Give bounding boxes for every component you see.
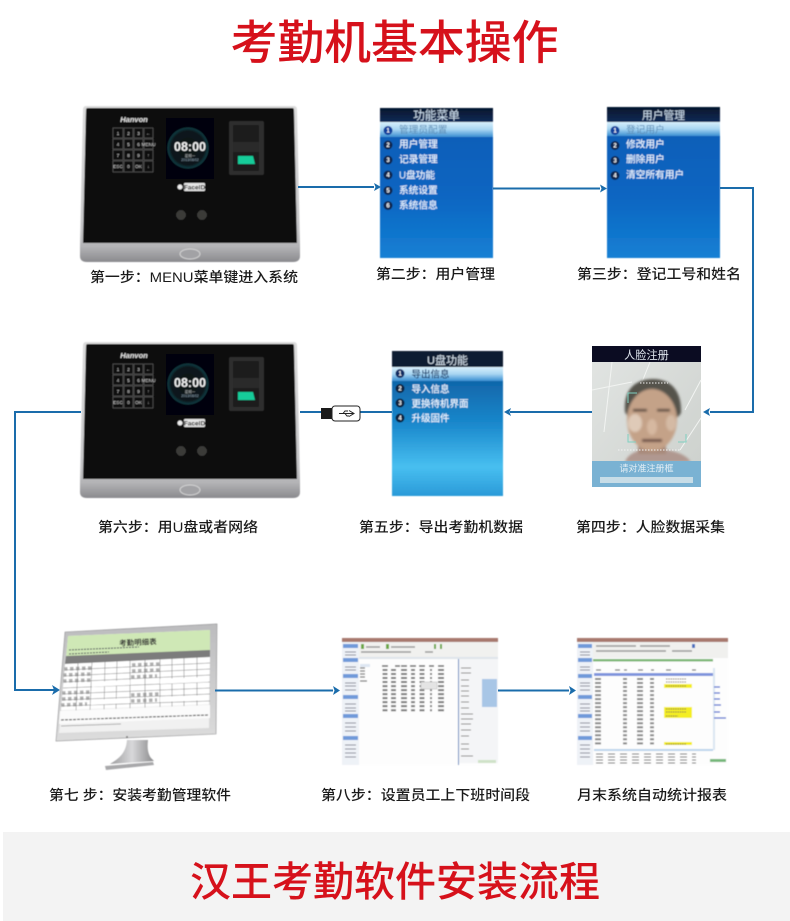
menu items: 4: [613, 174, 617, 180]
monitor stand: [110, 740, 154, 764]
screen clock: 星期一: [185, 389, 196, 394]
keypad: 4: [117, 378, 120, 384]
menu items: 3: [398, 401, 402, 407]
screen clock: 2013/08/02: [181, 394, 199, 398]
menu items: 1: [613, 128, 617, 134]
table selected row: [594, 673, 713, 676]
menu header: [380, 108, 493, 122]
footer heading: 汉王考勤软件安装流程: [190, 859, 600, 905]
infrared lenses: [176, 446, 206, 456]
menu items: [396, 368, 469, 424]
popup dialog: [421, 682, 437, 689]
prompt bar: [592, 461, 701, 487]
panel: USB function screen: U盘功能: [427, 353, 468, 367]
merged white rows: [91, 677, 208, 705]
menu items: 4: [398, 416, 402, 422]
caption step 5: 第五步：导出考勤机数据: [359, 519, 523, 535]
panel: face registration screen: [592, 346, 701, 487]
table body: [61, 657, 210, 710]
menu items: [610, 123, 684, 181]
keypad: ↑: [147, 154, 150, 159]
menu items: 3: [613, 158, 617, 164]
menu items: 清空所有用户: [626, 168, 684, 181]
keypad: 9: [137, 389, 140, 395]
device body: [80, 342, 300, 498]
screen clock: 2013/08/02: [181, 158, 199, 162]
menu items: 系统信息: [399, 198, 438, 212]
fingerprint sensor: [229, 357, 264, 411]
arrow: step 1 to step 2: [298, 183, 381, 191]
panel: USB function screen: [392, 351, 503, 496]
monitor with attendance sheet: 考勤明细表: [119, 636, 157, 648]
menu items: 3: [386, 158, 390, 164]
keypad: 2: [127, 367, 130, 373]
toolbar: [359, 642, 498, 659]
monitor with attendance sheet: [56, 624, 217, 770]
icon: USB drive: [321, 406, 360, 421]
keypad: [113, 364, 156, 408]
keypad: ESC: [113, 400, 123, 406]
highlighted row: [607, 122, 720, 136]
toolbar: [593, 642, 728, 658]
step captions row 3: [49, 787, 727, 803]
speaker: [180, 249, 200, 259]
keypad: MENU: [141, 142, 156, 148]
screen clock: 08:00: [174, 139, 206, 154]
keypad: ←: [146, 132, 151, 137]
FaceID badge: [178, 183, 205, 192]
keypad: 1: [117, 367, 120, 373]
menu items: 系统设置: [399, 184, 438, 196]
monitor chin: [126, 736, 128, 738]
screen clock: [166, 354, 214, 415]
keypad: 5: [127, 142, 130, 148]
screenshot: schedule software: [342, 638, 498, 765]
keypad: OK: [135, 400, 143, 406]
menu items: 记录管理: [399, 152, 438, 166]
device: sixth step attendance machine: [80, 342, 300, 498]
device body: [80, 106, 300, 262]
menu header: [607, 107, 720, 122]
caption step 1: 第一步：MENU菜单键进入系统: [90, 269, 298, 285]
keypad: MENU: [141, 378, 156, 384]
arrow: step 4 to step 5: [504, 408, 592, 416]
sidebar: [577, 642, 593, 765]
front panel: [83, 108, 297, 243]
menu header: [392, 351, 503, 367]
menu items: U盘功能: [399, 168, 435, 182]
brand: Hanvon: [120, 115, 148, 124]
keypad: 3: [137, 131, 140, 137]
notice lines: [69, 647, 139, 654]
FaceID badge: [178, 419, 205, 428]
grey table heading: [65, 650, 210, 664]
keypad: 0: [127, 164, 130, 170]
ceiling lines: [592, 362, 701, 450]
infrared lenses: [176, 210, 206, 220]
menu items: 更换待机界面: [412, 398, 469, 410]
notes row: [59, 705, 210, 724]
table rows: [385, 669, 441, 713]
step captions row 2: [98, 519, 725, 535]
sidebar: [342, 642, 359, 765]
panel: face registration screen: 人脸注册: [624, 348, 669, 362]
keypad: 6: [137, 378, 140, 384]
keypad: 7: [117, 153, 120, 159]
keypad: 4: [117, 142, 120, 148]
keypad: 6: [137, 142, 140, 148]
table text cells: [61, 664, 160, 705]
table header: [596, 669, 696, 671]
keypad: 8: [127, 153, 130, 159]
menu items: 导出信息: [412, 368, 450, 380]
keypad: ESC: [113, 164, 123, 170]
screen clock: 08:00: [174, 375, 206, 390]
keypad: ↓: [147, 401, 150, 406]
title bar: [577, 638, 728, 642]
keypad: 3: [137, 367, 140, 373]
screen: [59, 630, 210, 733]
menu items: 2: [613, 144, 617, 150]
arrow: monitor to schedule: [215, 686, 340, 695]
keypad: ↓: [147, 165, 150, 170]
scrollbar: [594, 749, 713, 751]
caption step 4: 第四步：人脸数据采集: [576, 519, 725, 535]
menu items: 1: [386, 128, 390, 134]
menu items: [384, 123, 448, 212]
screen clock: 星期一: [185, 153, 196, 158]
keypad: OK: [135, 164, 143, 170]
keypad: ←: [146, 368, 151, 373]
panel: user management screen: [607, 107, 720, 258]
keypad: 2: [127, 131, 130, 137]
keypad: [113, 128, 156, 172]
yellow flags: [664, 684, 692, 745]
highlighted row: [380, 122, 493, 137]
menu items: 登记用户: [626, 123, 665, 136]
title bar: [342, 638, 498, 642]
menu items: 6: [386, 204, 390, 210]
table grid: [62, 657, 210, 711]
keypad: 0: [127, 400, 130, 406]
summary: [596, 754, 696, 763]
menu items: 2: [398, 386, 402, 392]
connector line: device to USB drive to export screen: [300, 411, 392, 413]
menu items: 删除用户: [626, 152, 665, 166]
menu items: 用户管理: [399, 138, 438, 150]
keypad: 9: [137, 153, 140, 159]
monitor bezel: [56, 624, 217, 741]
highlighted row: [392, 367, 503, 381]
keypad: 1: [117, 131, 120, 137]
FaceID badge: FaceID: [184, 420, 205, 428]
caption report: 月末系统自动统计报表: [577, 787, 727, 803]
panel: function menu screen: [380, 108, 493, 258]
device: first step attendance machine: [80, 106, 300, 262]
caption step 8: 第八步：设置员工上下班时间段: [321, 787, 530, 803]
speaker: [180, 485, 200, 495]
screenshot: monthly report: [577, 638, 728, 765]
menu items: 2: [386, 143, 390, 149]
footer band: [3, 832, 790, 921]
FaceID badge: FaceID: [184, 184, 205, 192]
side links: [714, 687, 726, 718]
green heading band: [66, 630, 210, 658]
right options pane: [458, 659, 498, 765]
step captions row 1: [90, 266, 741, 285]
caption step 6: 第六步：用U盘或者网络: [98, 519, 258, 535]
table rows: [598, 678, 652, 746]
arrow: step 2 to step 3: [493, 184, 607, 192]
menu items: 1: [398, 372, 402, 378]
arrow: step 3 down to step 4: [703, 187, 754, 416]
panel: face registration screen: 请对准注册框: [619, 462, 674, 474]
keypad: ↑: [147, 390, 150, 395]
arrow: schedule to report: [498, 686, 576, 695]
caption step 7: 第七 步：安装考勤管理软件: [49, 787, 231, 803]
title: 考勤机基本操作: [230, 17, 558, 69]
panel: function menu screen: 功能菜单: [413, 108, 460, 122]
fingerprint sensor: [229, 121, 264, 175]
keypad: 8: [127, 389, 130, 395]
brand: Hanvon: [120, 351, 148, 360]
caption step 2: 第二步：用户管理: [376, 266, 495, 282]
table header: [382, 665, 444, 667]
face screen header: [592, 346, 701, 362]
arrow: device down to software: [14, 411, 81, 695]
keypad: 7: [117, 389, 120, 395]
tree list: [360, 665, 367, 681]
menu items: 4: [386, 173, 390, 179]
face photo: [625, 379, 691, 462]
menu items: 升级固件: [412, 412, 450, 424]
caption step 3: 第三步：登记工号和姓名: [577, 266, 741, 282]
menu items: 5: [386, 188, 390, 194]
menu items: 管理员配置: [399, 123, 448, 136]
menu items: 导入信息: [412, 384, 450, 396]
panel: user management screen: 用户管理: [642, 108, 685, 122]
front panel: [83, 344, 297, 479]
face alignment frame: [628, 393, 686, 442]
menu items: 修改用户: [626, 138, 665, 150]
screen clock: [166, 118, 214, 179]
keypad: 5: [127, 378, 130, 384]
